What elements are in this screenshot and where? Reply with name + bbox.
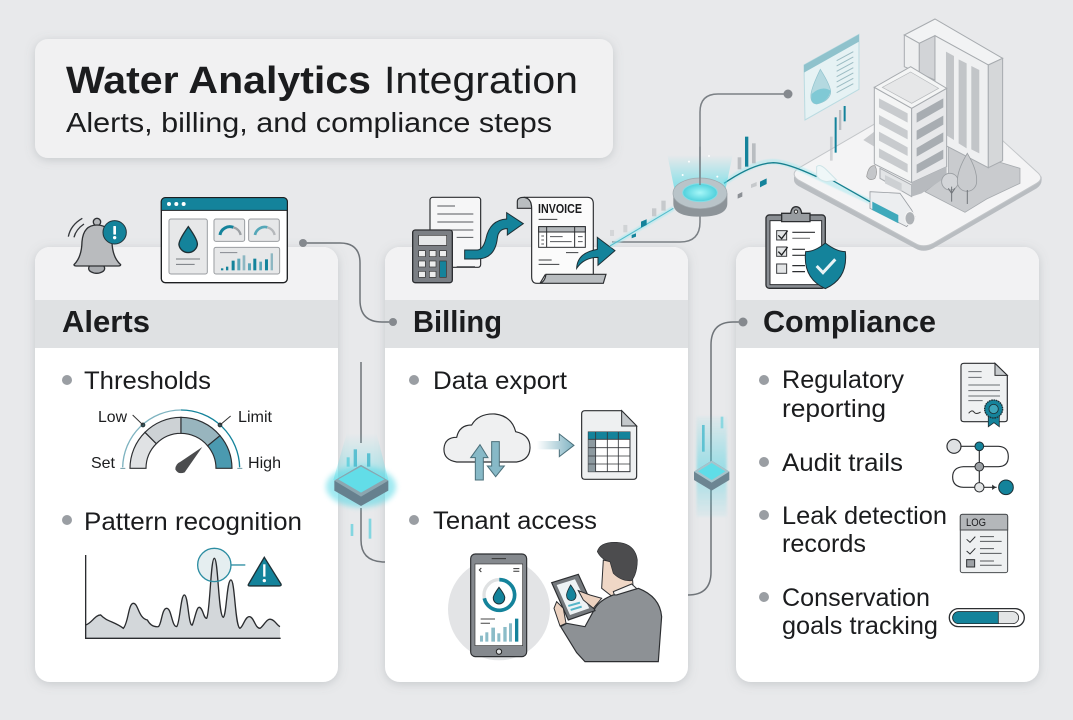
bullet: thresholds: Thresholds bbox=[84, 367, 211, 395]
icon: compliance clipboard with shield bbox=[766, 207, 846, 289]
heading: alerts: Alerts bbox=[62, 304, 150, 339]
bullet: conservation goals tracking: goals tracking bbox=[782, 612, 938, 640]
text label: invoice: INVOICE bbox=[538, 201, 582, 216]
bullet: regulatory reporting: Regulatory bbox=[782, 366, 904, 394]
text label: log: LOG bbox=[966, 517, 986, 529]
title card bbox=[35, 39, 613, 158]
bullet: data export: Data export bbox=[433, 367, 567, 395]
icon: threshold gauge bbox=[120, 410, 242, 473]
illustration: data flow stream bbox=[610, 201, 673, 246]
icon: cloud and spreadsheet bbox=[444, 411, 637, 480]
gauge labels: Set bbox=[91, 455, 116, 472]
title: Water Analytics bbox=[66, 60, 371, 102]
icon: person with tablet bbox=[552, 542, 662, 662]
icon: dashboard window bbox=[161, 198, 287, 283]
bullet: leak detection records: records bbox=[782, 530, 866, 558]
icon: invoice bbox=[517, 197, 615, 283]
gauge labels bbox=[91, 409, 281, 472]
bullet: leak detection records bbox=[759, 502, 947, 558]
bullet: leak detection records: Leak detection bbox=[782, 502, 947, 530]
icon: bell with alert badge bbox=[68, 218, 126, 273]
connector: alerts to billing bbox=[299, 239, 397, 326]
illustration: floating water panel bbox=[804, 34, 859, 120]
bullet: conservation goals tracking bbox=[759, 584, 938, 640]
icon: conservation progress bar bbox=[949, 609, 1024, 627]
bullet: tenant access: Tenant access bbox=[433, 507, 597, 535]
panel: alerts bbox=[35, 247, 338, 682]
bullet: audit trails: Audit trails bbox=[782, 449, 903, 477]
bullet: pattern recognition: Pattern recognition bbox=[84, 508, 302, 536]
chip: alerts to billing node bbox=[326, 433, 396, 539]
connector: billing to compliance bbox=[688, 318, 748, 595]
heading: billing: Billing bbox=[413, 304, 502, 339]
gauge labels: Limit bbox=[238, 409, 273, 426]
panel: billing bbox=[385, 247, 688, 682]
bullet: conservation goals tracking: Conservation bbox=[782, 584, 930, 612]
connector: hub to panels bbox=[612, 90, 792, 242]
connector: lower alerts link bbox=[361, 362, 385, 562]
bullet: regulatory reporting bbox=[759, 366, 904, 423]
chip: billing to compliance node bbox=[694, 417, 729, 517]
icon: log sheet bbox=[960, 514, 1008, 573]
icon: certificate bbox=[961, 363, 1007, 427]
panel: compliance bbox=[736, 247, 1039, 682]
icon: audit trail flow bbox=[947, 439, 1013, 495]
gauge labels: Low bbox=[98, 409, 127, 426]
subtitle: Alerts, billing, and compliance steps bbox=[66, 107, 552, 138]
bullet: regulatory reporting: reporting bbox=[782, 395, 886, 423]
icon: tenant phone bbox=[448, 554, 550, 660]
title light part: Integration bbox=[384, 60, 578, 102]
illustration: isometric building platform bbox=[724, 19, 1042, 251]
icon: document and calculator with arrow bbox=[413, 197, 523, 283]
heading: compliance: Compliance bbox=[763, 304, 936, 339]
icon: glowing hub bbox=[667, 147, 733, 217]
gauge labels: High bbox=[248, 455, 281, 472]
chart: pattern recognition bbox=[86, 548, 281, 638]
